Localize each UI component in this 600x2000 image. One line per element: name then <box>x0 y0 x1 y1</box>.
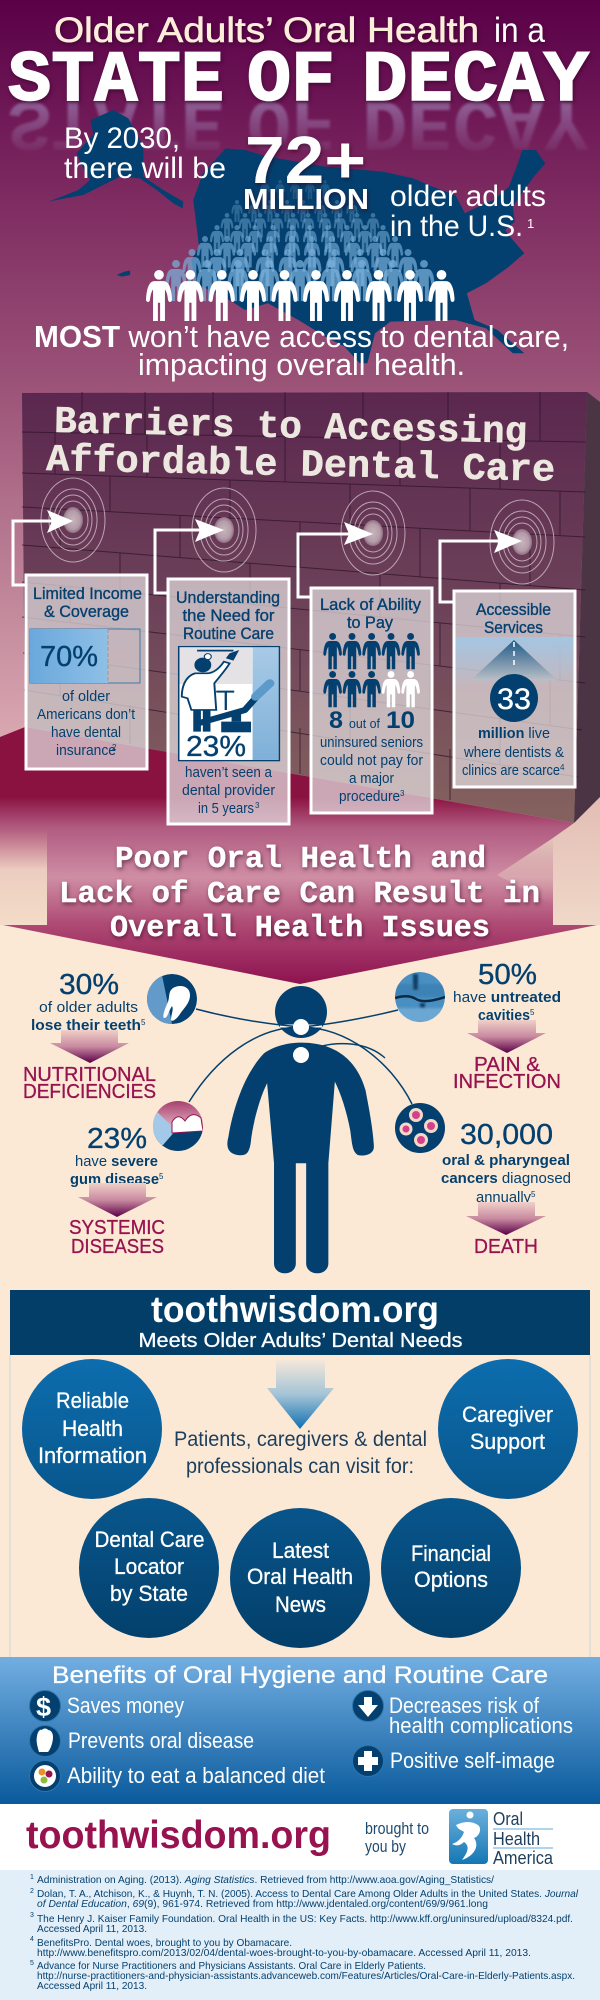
stat: untreated cavities: 5 <box>530 1008 535 1017</box>
side fill right of banner <box>553 797 600 925</box>
card 4 heading: Accessible <box>476 601 551 619</box>
circle: latest oral health news: Oral Health <box>247 1564 353 1589</box>
card: limited income: have dental <box>51 724 121 741</box>
stat: gum disease <box>70 1123 164 1188</box>
card: limited income: Americans don’t <box>37 706 136 723</box>
people 8 of 10 <box>323 633 420 707</box>
circle 33: 33 <box>497 683 531 716</box>
title: older adults oral health: Older Adults’ Oral Health <box>54 11 479 50</box>
most statement line 1: MOST won’t have access to dental care, <box>34 319 569 354</box>
card: lack of ability: a major <box>349 770 394 787</box>
circle: financial options: Options <box>414 1567 488 1592</box>
panel: floor and overall health issues banner <box>0 727 597 984</box>
panel: barriers wall <box>13 392 600 824</box>
circle: dental care locator: Locator <box>114 1554 184 1579</box>
result: systemic diseases: SYSTEMIC <box>69 1216 165 1239</box>
70 percent bar: 70% <box>40 641 98 673</box>
result: pain and infection: INFECTION <box>453 1070 561 1093</box>
visitors text <box>174 1428 427 1478</box>
70 percent bar <box>30 629 140 683</box>
arrow: cancer to death <box>466 1202 546 1235</box>
reference 4: 4 <box>30 1936 34 1943</box>
stat: untreated cavities <box>453 959 561 1024</box>
brought to you by <box>365 1819 429 1856</box>
circle: caregiver support <box>438 1359 578 1499</box>
arrow 3 <box>298 522 373 597</box>
result: pain and infection: PAIN & <box>474 1053 540 1076</box>
card 3 text: uninsured seniors <box>320 734 423 751</box>
8 out of 10: 8 <box>329 707 343 734</box>
banner heading <box>59 842 540 946</box>
card: accessible services: 4 <box>560 763 565 772</box>
logo: oral health america: Health <box>493 1829 540 1849</box>
stat: oral cancers: 30,000 <box>460 1119 553 1151</box>
reference 4: http://www.benefitspro.com/2013/02/04/dental-woes-brought-to-you-by-obamacare. Accessed April 11, 2013. <box>37 1947 531 1959</box>
card: lack of ability: could not pay for <box>320 752 423 769</box>
benefits heading: Benefits of Oral Hygiene and Routine Care <box>52 1662 548 1689</box>
circle: latest oral health news: News <box>275 1592 326 1617</box>
arrow: cavities to pain <box>467 1020 546 1053</box>
stat: teeth loss: 5 <box>141 1018 146 1027</box>
icon: cancer cells <box>395 1103 445 1153</box>
target 4 <box>490 500 554 584</box>
panel: benefits <box>0 1657 600 1804</box>
banner heading: Poor Oral Health and <box>115 842 486 877</box>
banner heading: Lack of Care Can Result in <box>59 877 540 912</box>
road <box>456 637 574 687</box>
card: understanding need: dental provider <box>182 782 275 799</box>
reference 5 <box>30 1960 575 1992</box>
circle: dental care locator <box>79 1498 219 1638</box>
stat: oral cancers: annually <box>476 1189 531 1206</box>
card: accessible services: clinics are scarce <box>462 762 560 779</box>
card: understanding need: the Need for <box>182 607 275 625</box>
background: cream lower page <box>0 925 600 1660</box>
box side lines <box>10 1355 590 1657</box>
stat: oral cancers <box>441 1119 571 1206</box>
result: nutritional deficiencies: NUTRITIONAL <box>23 1063 156 1086</box>
banner heading: Overall Health Issues <box>110 911 490 946</box>
arrow: teeth to nutrition <box>50 1030 129 1063</box>
stat: gum disease: 23% <box>87 1123 147 1155</box>
us map <box>48 110 545 363</box>
by 2030: By 2030, <box>64 122 180 155</box>
panel: references <box>0 1870 600 2000</box>
icon: down arrow <box>352 1690 384 1722</box>
connector highlight <box>280 1024 322 1028</box>
title: state of decay: STATE <box>8 40 224 122</box>
icon: tooth <box>147 974 197 1024</box>
stat: teeth loss: lose their teeth <box>31 1017 141 1034</box>
stat: gum disease: 5 <box>159 1172 164 1181</box>
icon: cavities <box>395 972 445 1022</box>
target 3 <box>341 491 405 575</box>
human figure <box>227 986 374 1273</box>
title reflection <box>8 80 590 162</box>
most statement line 2: impacting overall health. <box>138 347 465 382</box>
circle: reliable health information <box>22 1359 162 1499</box>
box header <box>10 1289 590 1355</box>
result: death: DEATH <box>474 1235 538 1258</box>
stat: untreated cavities: have untreated <box>453 989 561 1006</box>
reference 2: 2 <box>30 1888 34 1895</box>
million: MILLION <box>243 184 369 216</box>
card: lack of ability: procedure <box>339 788 400 805</box>
title reflection: DECAY <box>362 80 590 162</box>
reference 5: Advance for Nurse Practitioners and Physicians Assistants. Oral Care in Elderly Patients. <box>37 1960 426 1972</box>
card: lack of ability <box>311 588 432 813</box>
arrow 4 <box>440 530 522 602</box>
pale shaft highlight <box>497 838 553 905</box>
stat: untreated cavities: cavities <box>478 1007 530 1024</box>
circle: latest oral health news: Latest <box>272 1538 329 1563</box>
card: limited income: insurance <box>56 742 116 759</box>
reference 3: Accessed April 11, 2013. <box>37 1923 147 1935</box>
logo: oral health america <box>449 1809 554 1868</box>
reference 5: http://nurse-practitioners-and-physician-assistants.advanceweb.com/Features/Articles/Oral-Care-in-Elderly-Patients.aspx. <box>37 1970 575 1982</box>
target 1 <box>41 478 105 562</box>
card 1 heading: Limited Income <box>33 585 142 603</box>
side fill left of banner <box>0 830 47 925</box>
result: systemic diseases: DISEASES <box>71 1235 164 1258</box>
circle: financial options <box>381 1498 521 1638</box>
panel: benefits: Saves money <box>67 1693 184 1718</box>
reference 2: of Dental Education, 69(9), 961-974. Retrieved from http://www.jdentaled.org/content/69/9/961.long <box>37 1898 488 1910</box>
card 3 heading: Lack of Ability <box>320 596 422 614</box>
logo: oral health america: Oral <box>493 1809 523 1829</box>
card 4 text: million live <box>478 725 550 742</box>
arrow 1 <box>13 510 73 585</box>
icon: hand <box>30 1726 60 1756</box>
title reflection: OF <box>247 80 335 162</box>
there will be: there will be <box>64 152 226 185</box>
stat: teeth loss <box>31 969 146 1034</box>
circle: dental care locator: Dental Care <box>94 1527 204 1552</box>
card: limited income: 2 <box>112 743 117 752</box>
circle: caregiver support: Caregiver <box>462 1402 553 1427</box>
visitors text: professionals can visit for: <box>186 1455 414 1478</box>
wall face <box>22 392 587 823</box>
stat: teeth loss: 30% <box>59 969 119 1001</box>
card 1 text: of older <box>62 688 110 705</box>
23 percent: 23% <box>186 731 246 763</box>
card: lack of ability: to Pay <box>347 614 394 632</box>
card 2 text: haven’t seen a <box>185 764 273 781</box>
visitors text: Patients, caregivers & dental <box>174 1428 427 1451</box>
result: nutritional deficiencies: DEFICIENCIES <box>23 1080 156 1103</box>
arrow: gum to systemic <box>78 1183 157 1217</box>
stat: gum disease: gum disease <box>70 1171 159 1188</box>
connectors to icons <box>189 1009 412 1104</box>
older adults: older adults <box>390 180 546 213</box>
white dot throat <box>293 1019 309 1035</box>
title: state of decay: OF <box>247 40 335 122</box>
panel: benefits: Decreases risk of <box>389 1693 540 1718</box>
panel: benefits: Prevents oral disease <box>68 1728 254 1753</box>
card: accessible services: Services <box>484 619 543 637</box>
white dot chest <box>293 1047 309 1063</box>
big number 72+: 72+ <box>245 123 366 198</box>
reference 1: Administration on Aging. (2013). Aging Statistics. Retrieved from http://www.aoa.gov/Aging_Statistics/ <box>37 1874 494 1886</box>
reference 3 <box>30 1912 573 1935</box>
panel: benefits: Positive self-image <box>390 1748 555 1773</box>
circle: reliable health information: Health <box>62 1416 123 1441</box>
footnote 1: 1 <box>527 216 534 231</box>
card: understanding need <box>168 579 289 824</box>
intro text <box>34 122 569 382</box>
circle: financial options: Financial <box>411 1541 491 1566</box>
dentist illustration <box>179 647 279 761</box>
circle: caregiver support: Support <box>470 1429 545 1454</box>
card: lack of ability: out of <box>349 716 380 731</box>
result: pain and infection <box>453 1053 561 1093</box>
arrow: to visitors <box>267 1360 334 1429</box>
brought to you by: brought to <box>365 1819 429 1838</box>
header <box>8 11 590 122</box>
stat: oral cancers: cancers diagnosed <box>441 1170 571 1187</box>
brought to you by: you by <box>365 1837 406 1856</box>
circle: latest oral health news <box>230 1508 370 1648</box>
target 2 <box>192 488 256 572</box>
reference 2: Dolan, T. A., Atchison, K., & Huynh, T. N. (2005). Access to Dental Care Among Older Adults in the United States. Journal <box>37 1888 579 1900</box>
wall side <box>574 392 600 823</box>
circle: reliable health information: Reliable <box>56 1388 129 1413</box>
card: limited income <box>26 575 147 769</box>
result: nutritional deficiencies <box>23 1063 156 1103</box>
reference 5: 5 <box>30 1960 34 1967</box>
stat: oral cancers: oral & pharyngeal <box>442 1152 570 1169</box>
reference 5: Accessed April 11, 2013. <box>37 1980 147 1992</box>
card: limited income: & Coverage <box>44 603 129 621</box>
icon: dollar: $ <box>36 1692 51 1722</box>
card: understanding need: Routine Care <box>183 625 274 643</box>
crowd of older adults <box>146 180 455 321</box>
panel: footer logos <box>0 1804 600 1870</box>
reference 2 <box>30 1888 579 1910</box>
title: in a: in a <box>494 11 545 50</box>
panel: toothwisdom box <box>10 1289 590 1657</box>
icon: plus <box>352 1746 384 1776</box>
circle: dental care locator: by State <box>110 1581 188 1606</box>
circle: reliable health information: Information <box>38 1443 147 1468</box>
panel: benefits: health complications <box>389 1713 573 1738</box>
reference 4: BenefitsPro. Dental woes, brought to you by Obamacare. <box>37 1937 292 1949</box>
stat: untreated cavities: 50% <box>478 959 537 991</box>
box header: Meets Older Adults’ Dental Needs <box>138 1330 462 1352</box>
card 2 heading: Understanding <box>176 589 280 607</box>
stat: oral cancers: 5 <box>531 1190 536 1199</box>
card: accessible services <box>454 591 575 787</box>
reference 1: 1 <box>30 1874 34 1881</box>
card: understanding need: 3 <box>255 801 260 810</box>
result: systemic diseases <box>69 1216 165 1258</box>
title: state of decay: DECAY <box>362 40 590 122</box>
panel: benefits: Ability to eat a balanced diet <box>67 1763 325 1788</box>
reference 3: The Henry J. Kaiser Family Foundation. Oral Health in the US: Key Facts. http://www.kff.org/uninsured/upload/8324.pdf. <box>37 1913 573 1925</box>
card: understanding need: in 5 years <box>198 800 254 817</box>
logo: toothwisdom: toothwisdom.org <box>26 1814 331 1857</box>
icon: food plate <box>30 1760 60 1792</box>
background: plum gradient <box>0 0 600 830</box>
title: state of decay <box>8 40 590 122</box>
reference 3: 3 <box>30 1912 34 1919</box>
card: accessible services: where dentists & <box>463 744 564 761</box>
wall heading line 2: Affordable Dental Care <box>46 439 556 493</box>
arrow 2 <box>155 519 224 593</box>
stat: gum disease: have severe <box>75 1153 158 1170</box>
icon: dollar <box>30 1690 60 1722</box>
logo: oral health america: America <box>493 1848 554 1868</box>
card: lack of ability: 10 <box>386 707 415 734</box>
reference 4 <box>30 1936 531 1959</box>
title reflection: STATE <box>8 80 224 162</box>
box header: toothwisdom.org <box>151 1289 439 1330</box>
card: lack of ability: 3 <box>400 789 405 798</box>
stat: teeth loss: of older adults <box>39 999 138 1016</box>
wall heading line 1: Barriers to Accessing <box>54 401 528 455</box>
icon: gum disease <box>153 1101 203 1152</box>
circle 33 <box>490 674 538 722</box>
in the us: in the U.S. <box>390 210 523 243</box>
alaska <box>48 110 183 208</box>
